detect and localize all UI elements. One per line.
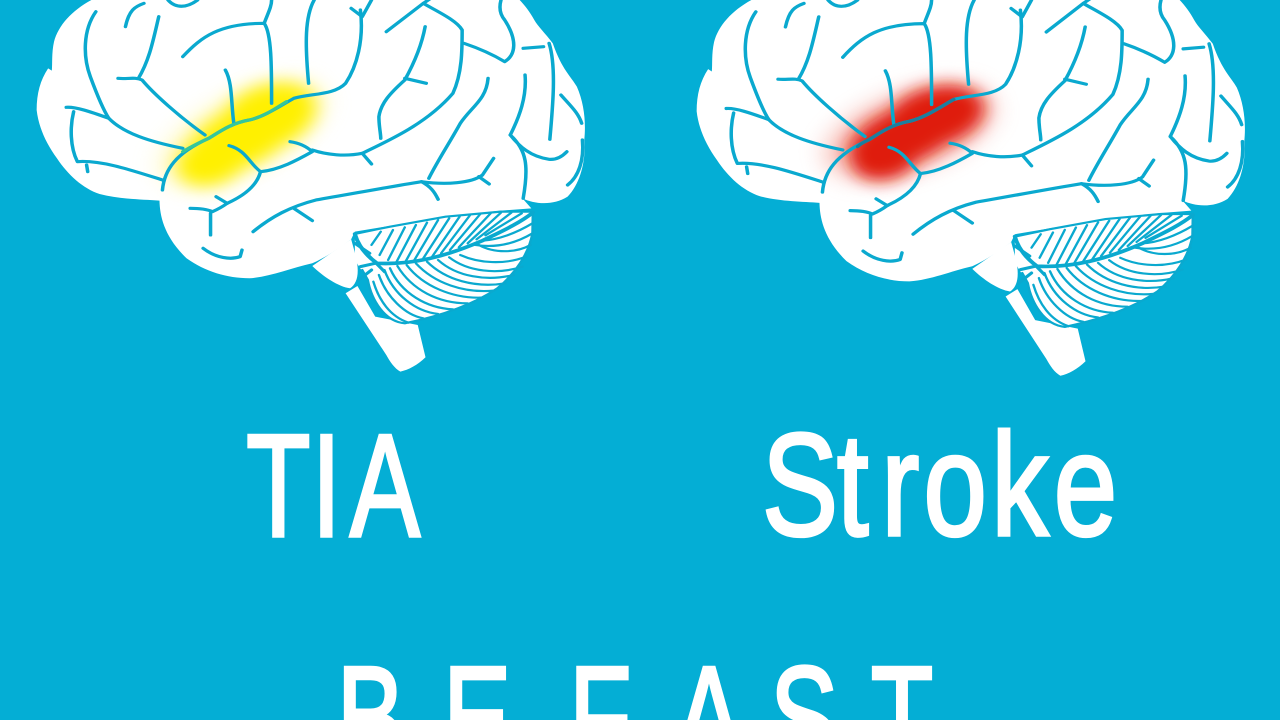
brain illustration: stroke with red affected area [697, 0, 1245, 376]
yellow affected area [142, 61, 342, 205]
brain illustration: TIA with yellow affected area [37, 0, 585, 372]
red affected area [812, 67, 1007, 196]
label: TIA: TIA [246, 404, 420, 567]
label: Stroke: Stroke [762, 402, 1117, 566]
